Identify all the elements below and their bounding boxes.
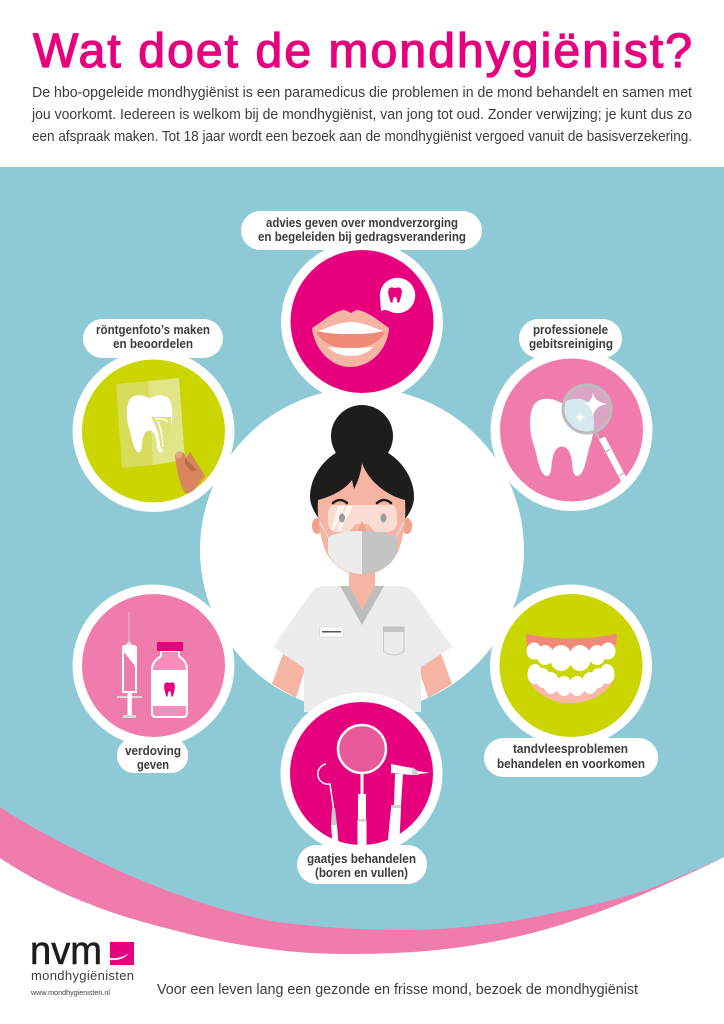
mirror [338,725,386,773]
panel: tandvlees [484,584,658,777]
arms [272,654,452,698]
label text: advies geven over mondverzorging [266,215,458,230]
label text: tandvleesproblemen [513,741,628,756]
panel: gaatjes [280,692,442,884]
intro text: De hbo-opgeleide mondhygiënist is een paramedicus die problemen in de mond behandelt en samen met [32,85,692,101]
label text [497,741,645,771]
title: Wat doet de mondhygiënist? [33,25,692,78]
logo: nvm mondhygiënisten [30,929,134,997]
face mask [320,522,404,574]
icon: x-ray with tooth and hand [116,378,205,495]
label pill [117,738,188,773]
intro text: een afspraak maken. Tot 18 jaar wordt een bezoek aan de mondhygiënist vergoed vanuit de basisverzekering. [32,129,692,145]
logo: nvm mondhygiënisten: www.mondhygienisten.nl [30,990,110,997]
label text [96,322,210,351]
icon: speech bubble with tooth [380,278,415,313]
label text: röntgenfoto’s maken [96,322,210,337]
logo: nvm mondhygiënisten: mondhygiënisten [31,968,134,983]
label text: professionele [533,322,608,337]
label text: verdoving [125,743,181,758]
central white circle [200,388,524,712]
label pill [241,211,482,250]
panel: röntgenfoto's [72,319,234,512]
icon: tooth with magnifier [530,385,624,480]
panel: gebitsreiniging [490,319,652,511]
label text [529,322,613,351]
icon: dental tools [318,725,430,852]
neck [349,560,375,600]
label text: geven [137,757,169,772]
eyebrows [333,500,391,503]
panel: advies geven [241,211,482,403]
label text: gaatjes behandelen [307,851,416,866]
label text: (boren en vullen) [315,865,408,880]
icon: teeth and gums [526,634,617,703]
label text: behandelen en voorkomen [497,756,645,771]
icon: vial [152,642,187,717]
uniform [273,586,452,712]
icon: syringe [117,612,142,718]
intro text [31,85,692,145]
label text: en beoordelen [113,336,193,351]
label text: en begeleiden bij gedragsverandering [258,229,466,244]
intro text: jou voorkomt. Iedereen is welkom bij de mondhygiënist, van jong tot oud. Zonder verwijzing; je kunt dus zo [31,107,692,123]
name tag [320,627,344,637]
pocket [383,627,404,655]
label text [258,215,466,244]
hair back and bun [331,405,393,467]
label pill [484,738,658,777]
label text [125,743,181,772]
collar [340,586,384,625]
icon: mouth [312,310,389,367]
panel: verdoving [72,584,234,773]
label text: gebitsreiniging [529,336,613,351]
goggles [328,505,397,532]
footer slogan: Voor een leven lang een gezonde en frisse mond, bezoek de mondhygiënist [157,982,638,998]
label pill [83,319,223,358]
face [318,463,405,575]
drill [391,764,412,805]
logo square [110,942,134,965]
label pill [519,319,622,358]
probe [318,764,334,812]
teal background [0,167,724,930]
illustration: dental hygienist [272,405,452,712]
ears [312,518,322,534]
logo: nvm mondhygiënisten: nvm [30,929,102,973]
pink swoosh [0,807,724,954]
label pill [297,845,427,884]
label text [307,851,416,880]
